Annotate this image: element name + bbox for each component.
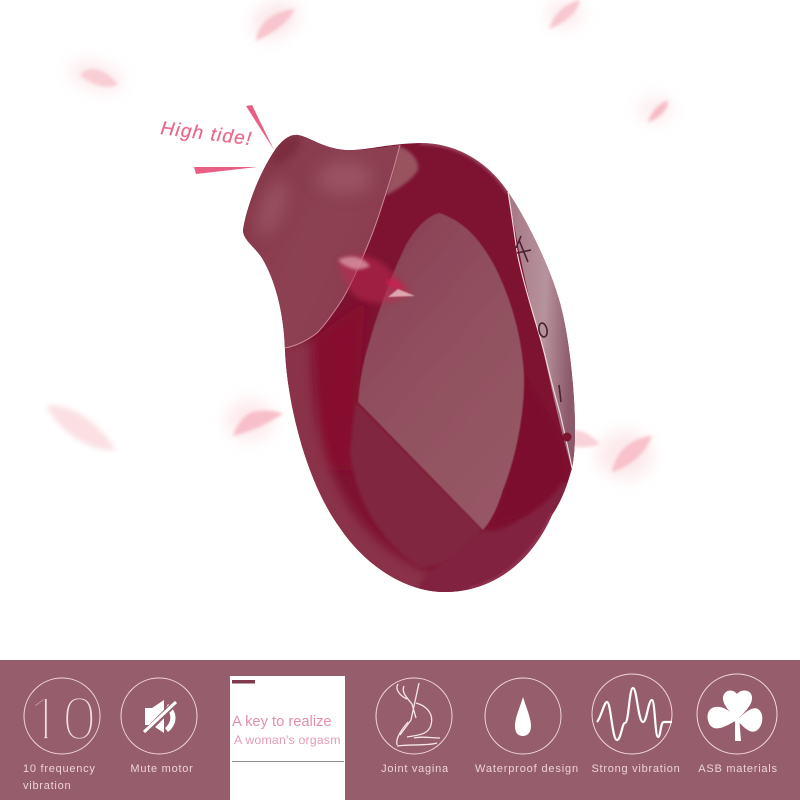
panel: key to realize card: A woman's orgasm (234, 733, 341, 747)
inner face (358, 213, 524, 530)
icon: water drop (515, 697, 531, 736)
product: device body (240, 130, 580, 610)
feature: 10 frequency vibration: 10 (28, 685, 96, 754)
petal: centre left (226, 400, 283, 440)
feature: ASB materials (697, 674, 778, 775)
petal: upper left (65, 55, 127, 97)
feature: waterproof design: Waterproof design (475, 763, 579, 775)
accent line upper (246, 105, 274, 150)
feature: waterproof design (475, 678, 579, 775)
band: right crimson (490, 375, 568, 525)
accent line lower (194, 167, 257, 174)
petal: top right (547, 0, 583, 29)
feature: mute motor (121, 678, 197, 775)
rim: left lighter (284, 338, 465, 592)
icon: waveform (597, 688, 672, 740)
petal: left (46, 406, 116, 450)
highlight near seam (385, 146, 418, 196)
petal: lower right pair (572, 430, 653, 479)
rim: top lighter (420, 143, 508, 192)
feature: strong vibration (591, 674, 681, 775)
callout: High tide (159, 105, 274, 174)
heading: High tide: High tide! (159, 118, 254, 150)
seam (285, 145, 400, 348)
feature: 10 frequency vibration: vibration (23, 780, 71, 792)
icon: muted speaker (144, 700, 176, 734)
feature: joint vagina: Joint vagina (381, 763, 449, 775)
region: lower dark facet (350, 402, 483, 567)
panel: key to realize card: A key to realize (232, 714, 332, 730)
icon: figure line art (397, 683, 440, 746)
petal: right (637, 96, 673, 124)
icon: clover (708, 691, 762, 741)
feature: 10 frequency vibration (23, 678, 100, 792)
feature: 10 frequency vibration: 10 frequency (23, 763, 96, 775)
feature: ASB materials: ASB materials (698, 763, 778, 775)
feature: mute motor: Mute motor (130, 763, 194, 775)
band: left crimson (318, 307, 364, 470)
control icons (516, 236, 572, 442)
panel: features bar (0, 660, 800, 800)
feature: strong vibration: Strong vibration (591, 763, 681, 775)
petal: top centre (246, 0, 304, 47)
rim: lower right (418, 482, 568, 592)
control panel (508, 192, 575, 468)
neck cap (243, 134, 400, 348)
panel: key to realize card (230, 676, 345, 800)
feature: joint vagina (376, 678, 452, 775)
reflected petal (337, 255, 415, 303)
